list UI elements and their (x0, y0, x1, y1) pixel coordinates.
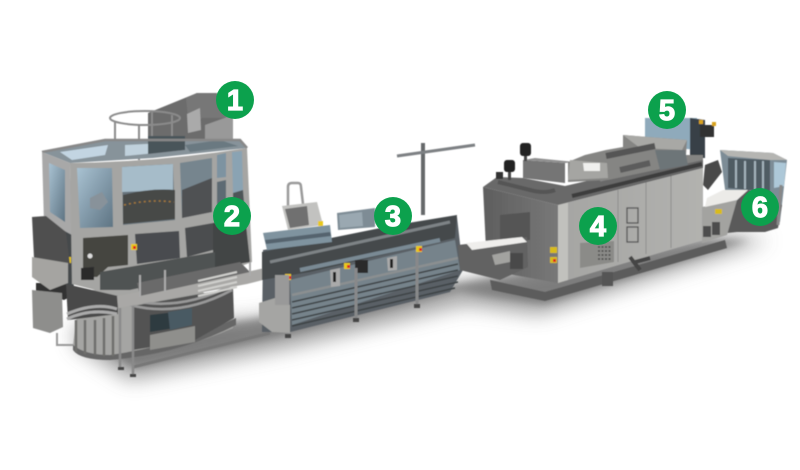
upper blue box (337, 208, 375, 230)
rotary base (66, 284, 236, 360)
oven left face (483, 187, 558, 283)
badge 5: 5 (659, 95, 675, 127)
badge 6: 6 (752, 192, 768, 224)
indicator lights (520, 143, 531, 156)
infeed conveyor (117, 262, 290, 377)
oven right face (558, 168, 703, 283)
section 1: rotary filler enclosure (42, 93, 252, 296)
operator panel (282, 183, 323, 230)
infeed box (458, 237, 528, 280)
badge 4: 4 (590, 211, 606, 243)
upper machinery (568, 135, 703, 182)
left glass (42, 152, 72, 240)
badge 3 (374, 197, 412, 235)
underframe (490, 240, 727, 301)
floor tie (133, 333, 270, 367)
lower rails (292, 264, 458, 326)
top ring guard (110, 111, 180, 160)
support posts (288, 250, 417, 335)
top box (523, 160, 565, 183)
left side unit (32, 216, 75, 345)
cabinet foot (259, 298, 290, 333)
frame roof (42, 140, 247, 163)
pole stand (397, 143, 475, 215)
section 3: transfer and packing line (259, 143, 475, 338)
lower windows (83, 235, 128, 277)
badge 1 (216, 81, 254, 119)
upper mechanism (262, 215, 457, 280)
badge 6 (741, 188, 779, 226)
product carousel (123, 190, 175, 224)
floor plate (73, 290, 233, 359)
badge 2: 2 (224, 201, 240, 233)
e-stop buttons (131, 244, 137, 250)
floor shadow (75, 235, 770, 380)
badge 2 (213, 197, 251, 235)
badge 1: 1 (227, 85, 243, 117)
badge 5 (648, 91, 686, 129)
line body (262, 217, 463, 332)
vent panel (580, 241, 614, 268)
section 5: top unit (568, 118, 722, 190)
upper windows (77, 168, 113, 228)
top deck (483, 152, 703, 205)
section 4: tunnel oven (458, 143, 727, 301)
e-stops (285, 274, 291, 280)
badge 4 (579, 207, 617, 245)
drive (630, 257, 650, 270)
central drive (133, 288, 234, 350)
hopper at rear (148, 93, 233, 140)
badge 3: 3 (385, 201, 401, 233)
blue cover bar (263, 225, 332, 250)
dark machinery upper left (66, 284, 118, 320)
section 6: outfeed unit (702, 150, 787, 243)
e-stops (550, 247, 557, 253)
door latches (627, 208, 638, 223)
front frame (70, 148, 252, 296)
